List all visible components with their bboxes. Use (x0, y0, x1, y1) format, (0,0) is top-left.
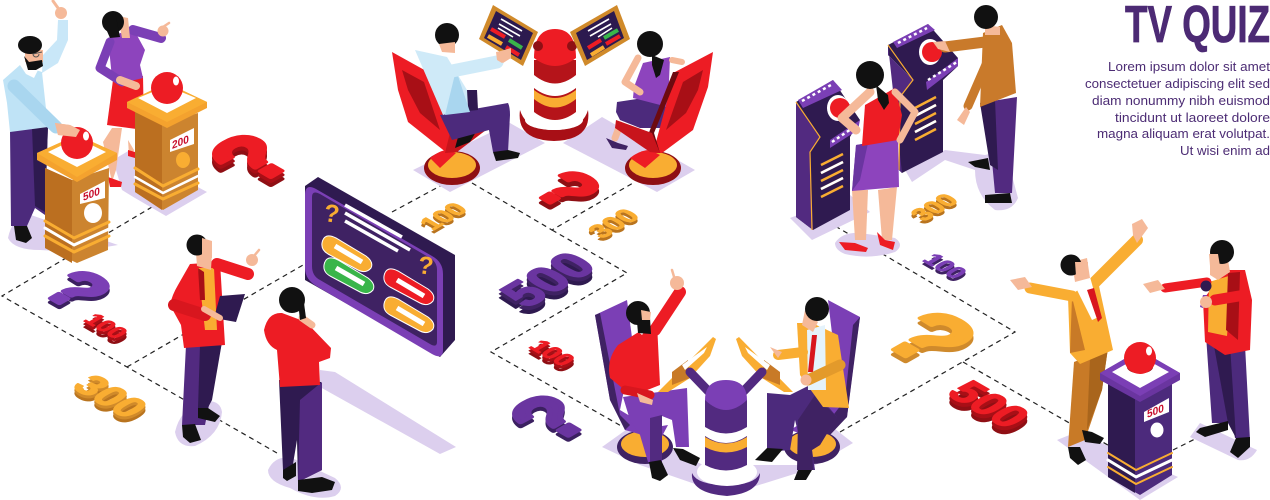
question mark: orange right: ? (858, 301, 1001, 384)
question mark: red top: ? (516, 160, 618, 219)
number: orange 100 top: 100 (414, 199, 474, 234)
description text (1085, 59, 1270, 158)
description text: Ut wisi enim ad (1180, 143, 1270, 158)
description text: magna aliquam erat volutpat. (1097, 126, 1270, 141)
number: red 100 center: 100 (523, 342, 581, 376)
number: purple 500: 500 (488, 253, 608, 322)
question mark: purple center: ? (487, 381, 613, 454)
left gold monitor (658, 337, 716, 392)
left arcade machine (796, 80, 860, 230)
number: purple 500: 500 (488, 249, 608, 318)
number: red 500 right: 500 (936, 383, 1040, 442)
board answer pills (322, 236, 434, 333)
woman seated (606, 31, 682, 150)
description text: diam nonummy nibh euismod (1092, 93, 1270, 108)
number: red 100 left: 100 (78, 313, 134, 345)
man in yellow jacket (755, 297, 849, 480)
center red pillar (520, 29, 588, 141)
host with microphone (1143, 240, 1252, 458)
man seated with tablet (415, 23, 520, 161)
right arcade machine (888, 24, 958, 173)
question mark: purple left: ? (25, 259, 129, 320)
floor shadows (8, 117, 1257, 500)
number: red 500 right: 500 (936, 379, 1040, 438)
podium 500: 500 (83, 185, 100, 204)
question mark: red top: ? (516, 165, 618, 224)
question mark: red left: ? (185, 128, 317, 204)
left red chair base (424, 151, 480, 185)
number: red 100 center: 100 (523, 336, 581, 370)
number: orange 300 left: 300 (63, 373, 156, 427)
group: contestants top center with red chairs (392, 5, 713, 185)
man in blue sweater (3, 1, 80, 243)
number: orange 300 right: 300 (905, 190, 965, 225)
question mark: red left: ? (185, 124, 317, 200)
right tablet screen (570, 5, 630, 66)
man with tablet (170, 234, 259, 443)
number: orange 300 right: 300 (905, 193, 965, 228)
number: orange 100 top: 100 (414, 202, 474, 237)
question mark: purple center: ? (487, 385, 613, 458)
question mark: purple left: ? (25, 263, 129, 324)
left red chair (392, 52, 490, 153)
group: contestants bottom center with purple chairs (595, 270, 860, 496)
man in red sweater from behind (264, 287, 335, 493)
number: purple 100 right: 100 (917, 253, 973, 285)
left tablet screen (479, 5, 538, 66)
number: orange 300 left: 300 (63, 376, 156, 430)
description text: consectetuer adipiscing elit sed (1085, 76, 1270, 91)
left purple chair (595, 300, 673, 464)
number: purple 500: 500 (488, 245, 608, 314)
quiz board (305, 177, 455, 357)
man in brown sweater (933, 5, 1017, 203)
number: orange 300 center: 300 (581, 205, 646, 242)
quiz board: ? (416, 251, 435, 281)
group: arcade machines and players (796, 5, 1017, 252)
number: purple 100 right: 100 (917, 250, 973, 282)
purple podium 500: 500 (1147, 402, 1164, 421)
number: orange 300 left: 300 (63, 370, 156, 424)
question mark: red left: ? (185, 120, 317, 196)
right purple chair (784, 300, 860, 464)
board question marks: ? (322, 199, 341, 229)
woman in red top (839, 61, 915, 252)
bearded man in red sweater (609, 270, 700, 481)
group: contestants at left podiums (3, 1, 207, 263)
man in gold suit (1010, 219, 1148, 465)
group: host scene (1010, 219, 1252, 495)
number: red 500 right: 500 (936, 375, 1040, 434)
podium 200: 200 (172, 133, 189, 152)
number: red 100 left: 100 (78, 316, 134, 348)
number: orange 300 center: 300 (581, 208, 646, 245)
podium 200 (127, 72, 207, 210)
question mark: orange right: ? (858, 296, 1001, 379)
purple podium 500 (1100, 342, 1180, 495)
woman in purple blouse (100, 11, 169, 187)
description text: tincidunt ut laoreet dolore (1115, 110, 1270, 125)
podium 500 (37, 123, 117, 263)
description text: Lorem ipsum dolor sit amet (1108, 59, 1270, 74)
number: red 100 left: 100 (78, 310, 134, 342)
center purple pillar (690, 372, 762, 496)
right red chair base (625, 151, 681, 185)
right gold monitor (736, 337, 793, 392)
right red chair (615, 52, 713, 153)
number: red 100 center: 100 (523, 339, 581, 373)
